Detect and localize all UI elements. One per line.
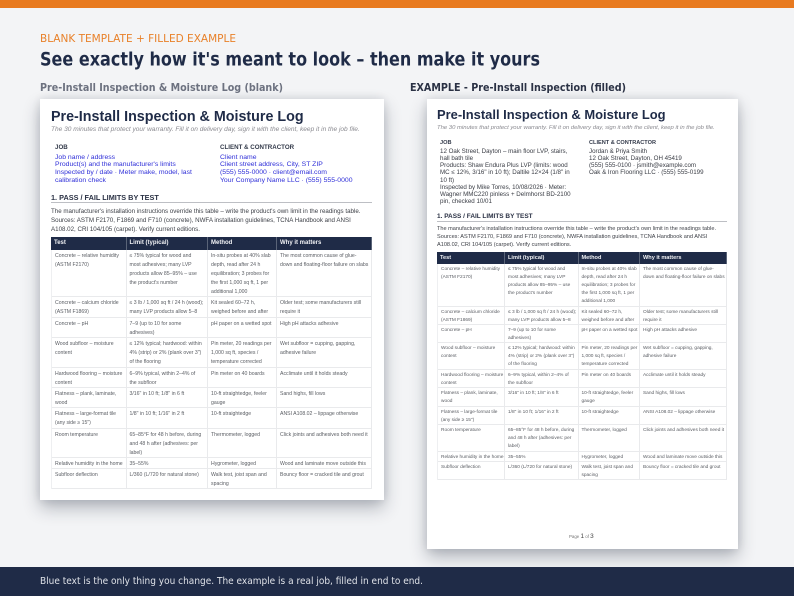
pass/fail limits table: Kit sealed 60–72 h, bbox=[582, 310, 622, 315]
job details: pin, checked 10/01 bbox=[440, 198, 492, 205]
section heading: 1. PASS / FAIL LIMITS BY TEST bbox=[51, 192, 159, 202]
pass/fail limits table: 10-ft straightedge, feeler bbox=[582, 391, 633, 396]
intro paragraph: A108.02, CRI 104/105 (carpet). Verify current editions. bbox=[51, 226, 200, 232]
pass/fail limits table: Acclimate until it holds steady bbox=[280, 370, 348, 376]
pass/fail limits table: 35–55% bbox=[508, 455, 526, 460]
pass/fail limits table: Method bbox=[582, 255, 601, 261]
job details: Products: Shaw Endura Plus LVP (limits: wood bbox=[440, 162, 568, 169]
client and contractor details: CLIENT & CONTRACTOR bbox=[589, 140, 656, 146]
pass/fail limits table: temperature corrected bbox=[211, 359, 262, 365]
pass/fail limits table: Pin meter, 20 readings per bbox=[211, 341, 271, 347]
pass/fail limits table: Why it matters bbox=[280, 240, 321, 246]
pass/fail limits table: many LVP products allow 5–8 bbox=[130, 309, 197, 315]
pass/fail limits table: 1/8" in 10 ft; 1/16" in 2 ft bbox=[130, 410, 184, 416]
pass/fail limits table: equilibration; 3 probes for bbox=[211, 271, 269, 277]
job details: 12 Oak Street, Dayton – main floor LVP, stairs, bbox=[440, 148, 567, 155]
pass/fail limits table: Room temperature bbox=[441, 428, 481, 433]
pass/fail limits table: Concrete – pH bbox=[55, 320, 88, 326]
pass/fail limits table: 10-ft straightedge, feeler bbox=[211, 390, 267, 396]
client and contractor details bbox=[220, 144, 353, 184]
main heading: See exactly how it's meant to look – then make it yours bbox=[40, 48, 540, 70]
pass/fail limits table: weighed before and after bbox=[211, 309, 268, 315]
heading block bbox=[40, 32, 626, 94]
client and contractor details: (555) 555-0100 · jsmith@example.com bbox=[589, 162, 696, 169]
pass/fail limits table: Subfloor deflection bbox=[55, 472, 98, 478]
pass/fail limits table: the first 1,000 sq ft, 1 per bbox=[582, 291, 634, 296]
pass/fail limits table: Bouncy floor = cracked tile and grout bbox=[280, 472, 364, 478]
pass/fail limits table: content bbox=[55, 350, 72, 356]
pass/fail limits table: depth, read after 24 h bbox=[211, 262, 260, 268]
client and contractor details: Client name bbox=[220, 154, 257, 160]
pass/fail limits table: gauge bbox=[582, 399, 595, 404]
pass/fail limits table: (any side ≥ 15") bbox=[55, 420, 91, 426]
pass/fail limits table: Flatness – large-format tile bbox=[441, 410, 497, 415]
pass/fail limits table bbox=[437, 252, 727, 480]
left column caption: Pre-Install Inspection & Moisture Log (blank) bbox=[40, 81, 283, 94]
pass/fail limits table: temperature corrected bbox=[582, 362, 628, 367]
pass/fail limits table: (any side ≥ 15") bbox=[441, 418, 474, 423]
pass/fail limits table: Flatness – large-format tile bbox=[55, 410, 116, 416]
kicker: blank template plus filled example: BLANK TEMPLATE + FILLED EXAMPLE bbox=[40, 32, 236, 45]
pass/fail limits table: 65–85°F for 48 h before, during bbox=[130, 432, 201, 438]
panel: filled example document bbox=[427, 99, 738, 549]
pass/fail limits table: additional 1,000 bbox=[211, 289, 247, 295]
pass/fail limits table: ≤ 3 lb / 1,000 sq ft / 24 h (wood); bbox=[508, 310, 576, 315]
pass/fail limits table: L/360 (L/720 for natural stone) bbox=[508, 465, 572, 470]
pass/fail limits table: Hardwood flooring – moisture bbox=[55, 370, 122, 376]
pass/fail limits table: 65–85°F for 48 h before, during bbox=[508, 428, 574, 433]
pass/fail limits table: 7–9 (up to 10 for some bbox=[508, 328, 556, 333]
pass/fail limits table: Why it matters bbox=[643, 255, 682, 261]
page number: Page 1 of 3 bbox=[569, 533, 594, 540]
pass/fail limits table: Test bbox=[54, 240, 66, 246]
pass/fail limits table: Thermometer, logged bbox=[582, 428, 627, 433]
pass/fail limits table: Wood and laminate move outside this bbox=[280, 460, 366, 466]
pass/fail limits table: spacing bbox=[211, 480, 229, 486]
pass/fail limits table: additional 1,000 bbox=[582, 299, 615, 304]
right column caption: EXAMPLE - Pre-Install Inspection (filled) bbox=[410, 81, 626, 94]
pass/fail limits table: equilibration; 3 probes for bbox=[582, 283, 635, 288]
pass/fail limits table: 35–55% bbox=[130, 460, 148, 466]
pass/fail limits table: Hygrometer, logged bbox=[211, 460, 256, 466]
pass/fail limits table: content bbox=[55, 380, 72, 386]
job details: hall bath tile bbox=[440, 155, 473, 162]
pass/fail limits table: adhesive failure bbox=[643, 354, 676, 359]
pass/fail limits table: In-situ probes at 40% slab bbox=[211, 253, 271, 259]
pass/fail limits table: weighed before and after bbox=[582, 318, 634, 323]
pass/fail limits table: Method bbox=[211, 240, 232, 246]
pass/fail limits table: Pin meter on 40 boards bbox=[211, 370, 265, 376]
pass/fail limits table: 6–9% typical, within 2–4% of bbox=[130, 370, 195, 376]
pass/fail limits table: Sand highs, fill lows bbox=[643, 391, 685, 396]
pass/fail limits table: Older test; some manufacturers still bbox=[643, 310, 718, 315]
pass/fail limits table: 7–9 (up to 10 for some bbox=[130, 320, 181, 326]
pass/fail limits table: down and floating-floor failure on slabs bbox=[643, 275, 725, 280]
intro paragraph bbox=[437, 226, 716, 248]
pass/fail limits table: The most common cause of glue- bbox=[280, 253, 357, 259]
pass/fail limits table: Wood subfloor – moisture bbox=[55, 341, 114, 347]
pass/fail limits table: Room temperature bbox=[55, 432, 98, 438]
job details: JOB bbox=[440, 140, 452, 146]
pass/fail limits table: the first 1,000 sq ft, 1 per bbox=[211, 280, 268, 286]
pass/fail limits table: High pH attacks adhesive bbox=[280, 320, 338, 326]
pass/fail limits table: down and floating-floor failure on slabs bbox=[280, 262, 368, 268]
pass/fail limits table: 10-ft straightedge bbox=[582, 410, 619, 415]
pass/fail limits table: (ASTM F1869) bbox=[55, 309, 89, 315]
job details: Inspected by Mike Torres, 10/08/2026 · Meter: bbox=[440, 184, 566, 191]
pass/fail limits table: Wet subfloor = cupping, gapping, bbox=[280, 341, 355, 347]
top accent bar bbox=[0, 0, 794, 8]
pass/fail limits table: (ASTM F2170) bbox=[55, 262, 89, 268]
client and contractor details: (555) 555-0000 · client@email.com bbox=[220, 169, 327, 176]
pass/fail limits table bbox=[51, 237, 372, 489]
pass/fail limits table: Kit sealed 60–72 h, bbox=[211, 300, 255, 306]
pass/fail limits table: 1,000 sq ft, species / bbox=[582, 354, 625, 359]
pass/fail limits table: Test bbox=[440, 255, 451, 261]
pass/fail limits table: L/360 (L/720 for natural stone) bbox=[130, 472, 199, 478]
pass/fail limits table: Walk test, joist span and bbox=[582, 465, 633, 470]
pass/fail limits table: 1/8" in 10 ft; 1/16" in 2 ft bbox=[508, 410, 559, 415]
job details: Wagner MMC220 pinless + Delmhorst BD-2100 bbox=[440, 191, 571, 198]
document subtitle: The 30 minutes that protect your warranty. Fill it on delivery day, sign it with the client, keep it in the job file. bbox=[437, 125, 715, 131]
job details: calibration check bbox=[55, 177, 106, 184]
pass/fail limits table: High pH attacks adhesive bbox=[643, 328, 697, 333]
pass/fail limits table: Wet subfloor = cupping, gapping, bbox=[643, 346, 713, 351]
intro paragraph: A108.02, CRI 104/105 (carpet). Verify current editions. bbox=[437, 242, 571, 248]
intro paragraph: Sources: ASTM F2170, F1869 and F710 (concrete), NWFA installation guidelines, TCNA Handbook and ANSI bbox=[51, 216, 351, 224]
intro paragraph bbox=[51, 208, 360, 232]
pass/fail limits table: of the flooring bbox=[508, 362, 537, 367]
pass/fail limits table: Concrete – relative humidity bbox=[55, 253, 119, 259]
pass/fail limits table: Concrete – relative humidity bbox=[441, 267, 500, 272]
pass/fail limits table: most adhesives; many LVP bbox=[130, 262, 192, 268]
pass/fail limits table: (ASTM F1869) bbox=[441, 318, 472, 323]
pass/fail limits table: Concrete – calcium chloride bbox=[55, 300, 119, 306]
intro paragraph: The manufacturer's installation instructions override this table – write the product's own limit in the readings table. bbox=[437, 226, 716, 232]
pass/fail limits table: ANSI A108.02 – lippage otherwise bbox=[280, 410, 358, 416]
pass/fail limits table: products allow 85–95% – use bbox=[508, 283, 570, 288]
client and contractor details: Your Company Name LLC · (555) 555-0000 bbox=[220, 177, 353, 184]
pass/fail limits table: Concrete – calcium chloride bbox=[441, 310, 500, 315]
pass/fail limits table: Older test; some manufacturers still bbox=[280, 300, 361, 306]
pass/fail limits table: ≤ 3 lb / 1,000 sq ft / 24 h (wood); bbox=[130, 300, 203, 306]
pass/fail limits table: 6–9% typical, within 2–4% of bbox=[508, 373, 569, 378]
client and contractor details: CLIENT & CONTRACTOR bbox=[220, 144, 294, 151]
pass/fail limits table: ≤ 12% typical; hardwood: within bbox=[508, 346, 575, 351]
panel: blank template document bbox=[40, 99, 384, 500]
pass/fail limits table: adhesives) bbox=[130, 330, 154, 336]
client and contractor details: 12 Oak Street, Dayton, OH 45419 bbox=[589, 155, 682, 162]
pass/fail limits table: ≤ 75% typical for wood and bbox=[508, 267, 565, 272]
pass/fail limits table: the subfloor bbox=[130, 380, 156, 386]
document title: Pre-Install Inspection & Moisture Log bbox=[437, 107, 666, 122]
job details: 10 ft) bbox=[440, 177, 454, 184]
client and contractor details: Jordan & Priya Smith bbox=[589, 148, 647, 155]
pass/fail limits table: 4% (strip) or 2% (plank over 3") bbox=[130, 350, 201, 356]
job details: MC ≤ 12%, 3/16" in 10 ft); Daltile 12×24 (1/8" in bbox=[440, 169, 570, 176]
pass/fail limits table: content bbox=[441, 354, 457, 359]
pass/fail limits table: gauge bbox=[211, 400, 225, 406]
pass/fail limits table: the product's number bbox=[508, 291, 553, 296]
job details: JOB bbox=[55, 144, 68, 151]
pass/fail limits table: Wood and laminate move outside this bbox=[643, 455, 722, 460]
pass/fail limits table: most adhesives; many LVP bbox=[508, 275, 565, 280]
pass/fail limits table: Flatness – plank, laminate, bbox=[55, 390, 116, 396]
document title: Pre-Install Inspection & Moisture Log bbox=[51, 109, 304, 125]
pass/fail limits table: 3/16" in 10 ft; 1/8" in 6 ft bbox=[508, 391, 559, 396]
intro paragraph: Sources: ASTM F2170, F1869 and F710 (concrete), NWFA installation guidelines, TCNA Handbook and ANSI bbox=[437, 234, 707, 240]
pass/fail limits table: Pin meter on 40 boards bbox=[582, 373, 631, 378]
client and contractor details bbox=[589, 140, 704, 176]
pass/fail limits table: label) bbox=[130, 450, 142, 456]
pass/fail limits table: spacing bbox=[582, 473, 598, 478]
pass/fail limits table: wood bbox=[55, 400, 67, 406]
pass/fail limits table: pH paper on a wetted spot bbox=[582, 328, 637, 333]
client and contractor details: Client street address, City, ST ZIP bbox=[220, 161, 323, 168]
pass/fail limits table: Limit (typical) bbox=[130, 240, 169, 246]
pass/fail limits table: the subfloor bbox=[508, 381, 533, 386]
section heading: 1. PASS / FAIL LIMITS BY TEST bbox=[437, 212, 533, 220]
pass/fail limits table: depth, read after 24 h bbox=[582, 275, 627, 280]
pass/fail limits table: Click joints and adhesives both need it bbox=[643, 428, 724, 433]
pass/fail limits table: Relative humidity in the home bbox=[55, 460, 123, 466]
pass/fail limits table: and 48 h after (adhesives: per bbox=[130, 440, 198, 446]
pass/fail limits table: Relative humidity in the home bbox=[441, 455, 504, 460]
pass/fail limits table: The most common cause of glue- bbox=[643, 267, 714, 272]
pass/fail limits table: adhesives) bbox=[508, 336, 531, 341]
pass/fail limits table: Thermometer, logged bbox=[211, 432, 260, 438]
document subtitle: The 30 minutes that protect your warranty. Fill it on delivery day, sign it with the client, keep it in the job file. bbox=[51, 126, 360, 133]
pass/fail limits table: 4% (strip) or 2% (plank over 3") bbox=[508, 354, 574, 359]
bottom caption bar bbox=[0, 567, 794, 596]
pass/fail limits table: ≤ 12% typical; hardwood: within bbox=[130, 341, 202, 347]
intro paragraph: The manufacturer's installation instructions override this table – write the product's own limit in the readings table. bbox=[51, 208, 360, 214]
caption text: Blue text is the only thing you change. The example is a real job, filled in end to end. bbox=[40, 576, 423, 587]
pass/fail limits table: and 48 h after (adhesives: per bbox=[508, 436, 571, 441]
pass/fail limits table: Subfloor deflection bbox=[441, 465, 480, 470]
pass/fail limits table: Walk test, joist span and bbox=[211, 472, 267, 478]
pass/fail limits table: Wood subfloor – moisture bbox=[441, 346, 495, 351]
pass/fail limits table: many LVP products allow 5–8 bbox=[508, 318, 571, 323]
pass/fail limits table: the product's number bbox=[130, 280, 178, 286]
pass/fail limits table: Limit (typical) bbox=[508, 255, 544, 261]
pass/fail limits table: wood bbox=[441, 399, 452, 404]
job details bbox=[55, 144, 192, 184]
pass/fail limits table: of the flooring bbox=[130, 359, 161, 365]
pass/fail limits table: 10-ft straightedge bbox=[211, 410, 251, 416]
pass/fail limits table: Concrete – pH bbox=[441, 328, 472, 333]
job details: Product(s) and the manufacturer's limits bbox=[55, 161, 176, 168]
pass/fail limits table: adhesive failure bbox=[280, 350, 316, 356]
job details: Inspected by / date · Meter make, model, last bbox=[55, 169, 192, 176]
pass/fail limits table: 1,000 sq ft, species / bbox=[211, 350, 258, 356]
pass/fail limits table: Hygrometer, logged bbox=[582, 455, 623, 460]
pass/fail limits table: products allow 85–95% – use bbox=[130, 271, 197, 277]
pass/fail limits table: Pin meter, 20 readings per bbox=[582, 346, 637, 351]
pass/fail limits table: Acclimate until it holds steady bbox=[643, 373, 706, 378]
pass/fail limits table: 3/16" in 10 ft; 1/8" in 6 ft bbox=[130, 390, 184, 396]
job details bbox=[440, 140, 571, 205]
pass/fail limits table: Bouncy floor = cracked tile and grout bbox=[643, 465, 720, 470]
pass/fail limits table: Hardwood flooring – moisture bbox=[441, 373, 503, 378]
pass/fail limits table: require it bbox=[280, 309, 300, 315]
pass/fail limits table: require it bbox=[643, 318, 662, 323]
pass/fail limits table: ANSI A108.02 – lippage otherwise bbox=[643, 410, 715, 415]
job details: Job name / address bbox=[55, 154, 115, 160]
pass/fail limits table: label) bbox=[508, 444, 520, 449]
client and contractor details: Oak & Iron Flooring LLC · (555) 555-0199 bbox=[589, 169, 704, 176]
pass/fail limits table: (ASTM F2170) bbox=[441, 275, 472, 280]
pass/fail limits table: ≤ 75% typical for wood and bbox=[130, 253, 191, 259]
pass/fail limits table: Flatness – plank, laminate, bbox=[441, 391, 498, 396]
pass/fail limits table: pH paper on a wetted spot bbox=[211, 320, 271, 326]
pass/fail limits table: Sand highs, fill lows bbox=[280, 390, 325, 396]
pass/fail limits table: Click joints and adhesives both need it bbox=[280, 432, 368, 438]
pass/fail limits table: In-situ probes at 40% slab bbox=[582, 267, 637, 272]
pass/fail limits table: content bbox=[441, 381, 457, 386]
